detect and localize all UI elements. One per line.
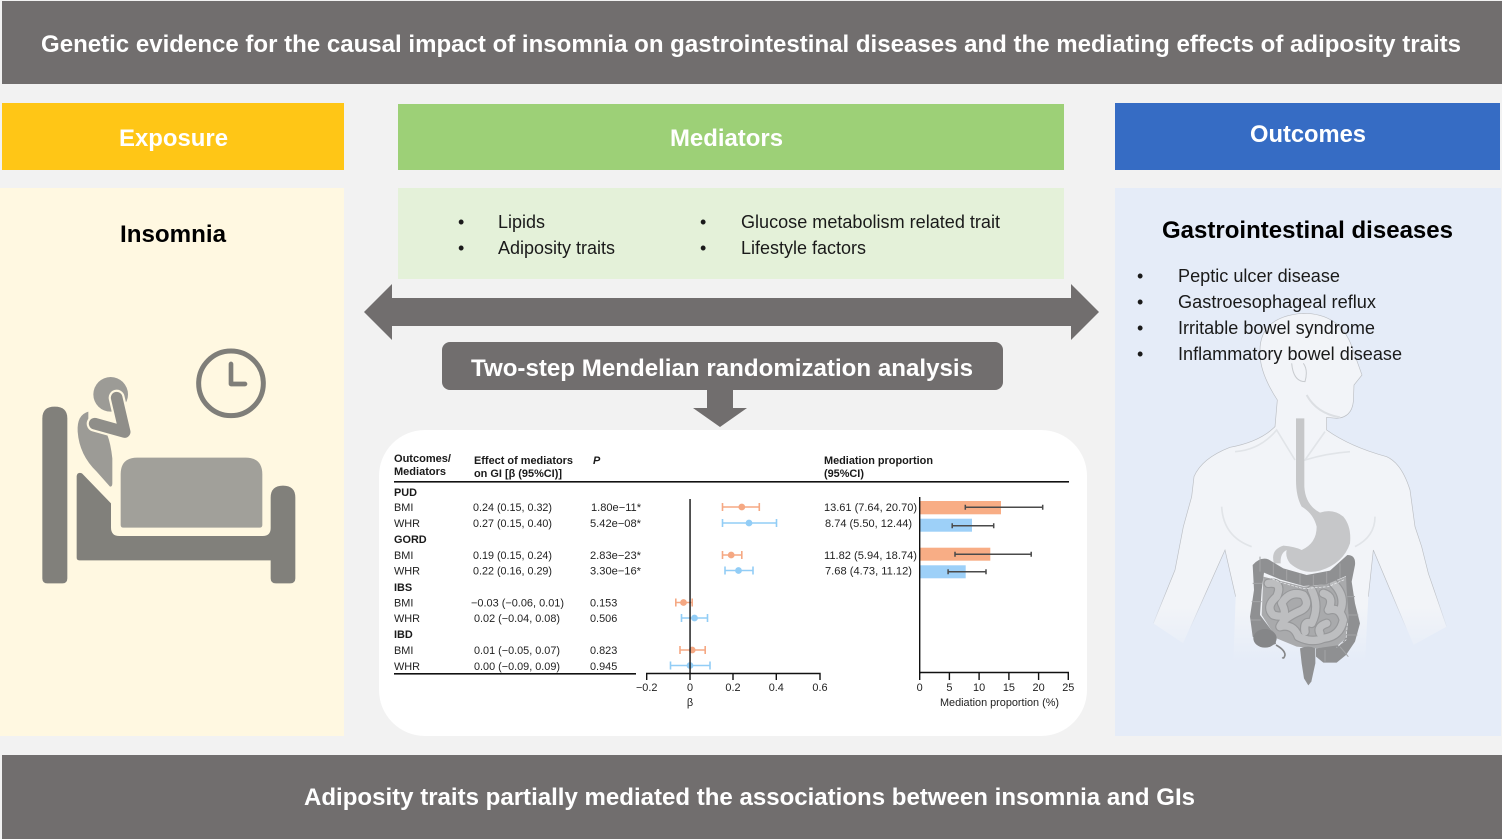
table header: P [593, 455, 601, 467]
table rows: 0.19 (0.15, 0.24) [473, 550, 552, 562]
arrow: down to results [693, 390, 747, 427]
table rows: 0.27 (0.15, 0.40) [473, 518, 552, 530]
outcomes list: Inflammatory bowel disease [1178, 344, 1402, 364]
table rows: WHR [394, 613, 420, 625]
outcomes list: • [1137, 344, 1143, 364]
table header: Effect of mediators [474, 455, 573, 467]
table rows: PUD [394, 487, 417, 499]
illustration: intestines [1250, 555, 1360, 685]
table rows: 0.823 [590, 645, 617, 657]
outcomes list [1137, 266, 1402, 364]
table rows: 0.00 (−0.09, 0.09) [474, 661, 560, 673]
panel: outcomes [1115, 103, 1501, 736]
mediators list: • [458, 238, 464, 258]
outcomes header: Outcomes [1250, 121, 1366, 148]
table header: Outcomes/ [394, 453, 451, 465]
panel: results chart [379, 430, 1087, 736]
outcomes list: Gastroesophageal reflux [1178, 292, 1376, 312]
outcomes list: Irritable bowel syndrome [1178, 318, 1375, 338]
mediators header: Mediators [670, 125, 783, 152]
table rows: 0.22 (0.16, 0.29) [473, 566, 552, 578]
outcomes list: Peptic ulcer disease [1178, 266, 1340, 286]
table rows: WHR [394, 566, 420, 578]
forest plot: 0.4 [769, 682, 784, 694]
bar chart: mediation proportion: Mediation proportion (%) [940, 697, 1059, 709]
table rows: 0.24 (0.15, 0.32) [473, 502, 552, 514]
outcomes list: • [1137, 318, 1143, 338]
outcomes header [1115, 103, 1500, 170]
conclusion banner: Adiposity traits partially mediated the associations between insomnia and GIs [304, 784, 1195, 811]
table rows: BMI [394, 550, 413, 562]
table rows: 0.153 [590, 598, 617, 610]
table rows: WHR [394, 661, 420, 673]
mediators header [398, 104, 1064, 170]
mediation proportion values: 8.74 (5.50, 12.44) [825, 518, 912, 530]
outcomes list: • [1137, 266, 1143, 286]
method label [442, 342, 1003, 390]
mediators list: • [458, 212, 464, 232]
title banner: Genetic evidence for the causal impact of insomnia on gastrointestinal diseases and the mediating effects of adiposity traits [41, 31, 1461, 58]
table rows: BMI [394, 502, 413, 514]
mediation proportion values [824, 502, 917, 578]
table header: (95%CI) [824, 468, 864, 480]
forest plot: −0.2 [636, 682, 657, 694]
conclusion banner [2, 755, 1502, 839]
table rows: 0.02 (−0.04, 0.08) [474, 613, 560, 625]
panel: mediators [398, 104, 1064, 279]
bar chart: mediation proportion: 5 [946, 682, 952, 694]
bar chart: mediation proportion: 25 [1062, 682, 1074, 694]
mediators list [398, 188, 1064, 279]
outcomes body background [1115, 188, 1501, 736]
forest plot: 0.6 [812, 682, 828, 694]
method label: Two-step Mendelian randomization analysis [471, 355, 973, 382]
table header [394, 453, 1069, 483]
bar chart: mediation proportion [917, 497, 1074, 709]
outcomes list: • [1137, 292, 1143, 312]
mediation proportion values: 11.82 (5.94, 18.74) [824, 550, 917, 562]
forest plot [636, 499, 828, 709]
panel: exposure [0, 103, 344, 736]
table header: on GI [β (95%CI)] [474, 468, 562, 480]
table rows: −0.03 (−0.06, 0.01) [471, 598, 564, 610]
mediation proportion values: 7.68 (4.73, 11.12) [825, 566, 912, 578]
bar chart: mediation proportion: 15 [1003, 682, 1015, 694]
arrow: double-headed exposure to outcomes [364, 284, 1099, 340]
mediators list: Lipids [498, 212, 545, 232]
icon: person awake in bed with clock [42, 351, 295, 583]
exposure body background [0, 188, 344, 736]
table rows: GORD [394, 534, 427, 546]
table rows: BMI [394, 645, 413, 657]
table rows: 3.30e−16* [590, 566, 642, 578]
bar chart: mediation proportion: 10 [973, 682, 985, 694]
bar chart: mediation proportion: 20 [1033, 682, 1045, 694]
forest plot: 0 [687, 682, 693, 694]
mediators list: Glucose metabolism related trait [741, 212, 1000, 232]
mediators list: Lifestyle factors [741, 238, 866, 258]
table rows: IBS [394, 582, 412, 594]
mediators list: • [700, 212, 706, 232]
table rows: 1.80e−11* [591, 502, 642, 514]
table header: Mediators [394, 466, 446, 478]
table rows: BMI [394, 598, 413, 610]
exposure header [2, 103, 344, 170]
exposure header: Exposure [119, 125, 228, 152]
table rows: IBD [394, 629, 413, 641]
title banner [2, 1, 1502, 84]
table rows: 0.01 (−0.05, 0.07) [474, 645, 560, 657]
mediators list: • [700, 238, 706, 258]
table rows: 2.83e−23* [590, 550, 642, 562]
table header: Mediation proportion [824, 455, 933, 467]
illustration: human torso with digestive tract [1153, 313, 1447, 685]
bar chart: mediation proportion: 0 [917, 682, 923, 694]
table rows: 5.42e−08* [590, 518, 642, 530]
exposure heading: Insomnia [120, 221, 227, 248]
table rows: WHR [394, 518, 420, 530]
table rows [394, 487, 642, 675]
forest plot: β [687, 697, 693, 709]
outcomes heading: Gastrointestinal diseases [1162, 217, 1453, 244]
mediation proportion values: 13.61 (7.64, 20.70) [824, 502, 917, 514]
table rows: 0.506 [590, 613, 617, 625]
forest plot: 0.2 [725, 682, 741, 694]
mediators list: Adiposity traits [498, 238, 615, 258]
table rows: 0.945 [590, 661, 617, 673]
